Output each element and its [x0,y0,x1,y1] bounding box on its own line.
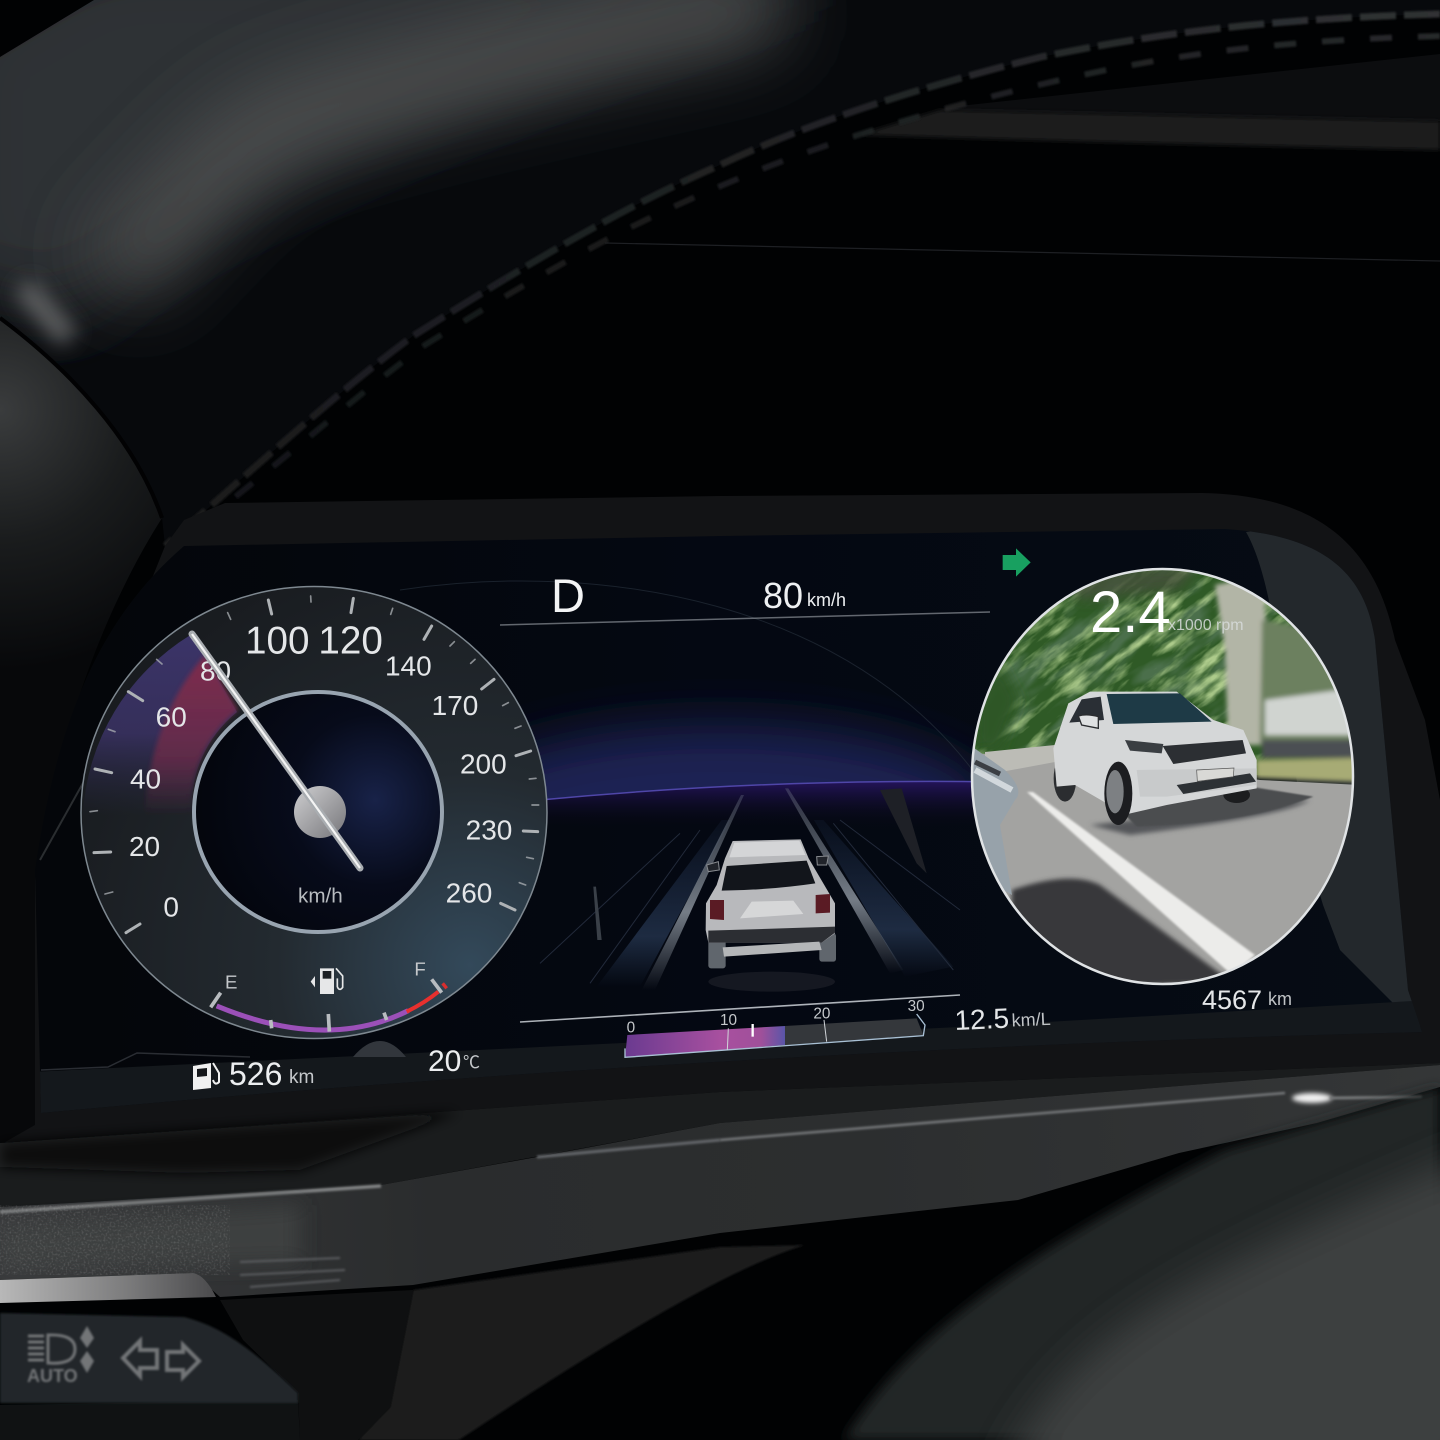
fuel gauge: E [225,971,237,992]
outside temperature [428,1045,480,1078]
speed labels: 80 [200,656,231,687]
photo backdrop: trees [975,570,1306,775]
speedometer [81,586,547,1038]
tick marks [90,596,539,933]
fuel economy readout: 12.5 [954,1003,1010,1036]
odometer: 4567 [1202,985,1262,1015]
fuel economy readout [954,1001,1051,1036]
outside temperature: 20 [428,1045,461,1078]
stalk icons [27,1326,199,1386]
icon: turn arrows [123,1341,199,1377]
fuel economy bar: 10 [720,1012,737,1029]
fuel economy bar: 0 [627,1020,635,1037]
road lanes [540,788,960,990]
secondary bezel panel [0,1063,1440,1207]
speed labels: 100 [245,619,309,662]
photo backdrop: road [982,754,1352,983]
speed labels: 40 [130,763,161,794]
cruise speed: 80 [763,575,803,616]
range readout [193,1056,314,1092]
side mirror [974,748,1018,895]
icon: beam arrows [80,1326,94,1373]
horizon glow [528,697,974,814]
following car [706,839,836,992]
speed labels: 230 [466,814,512,845]
outside temperature: ℃ [463,1053,480,1072]
range readout: 526 [229,1056,282,1092]
leather wedge [220,1290,413,1440]
icon: fuel pump [193,1063,219,1090]
cluster bezel [0,493,1440,1143]
speed labels [129,619,512,923]
fuel gauge: F [414,959,426,980]
fuel economy bar: 30 [908,998,925,1015]
oncoming car photo [1053,692,1313,827]
purple speed sector [83,634,238,815]
gear indicator: D [551,569,585,622]
lane line [1027,792,1255,975]
speed labels: 60 [156,702,187,733]
speed labels: 170 [432,690,478,721]
icon: green turn arrow [1003,548,1031,577]
stalk [0,1313,300,1440]
range readout: km [289,1067,314,1088]
rpm readout [1090,580,1244,645]
odometer: km [1268,989,1292,1009]
needle [192,634,360,868]
needle hub [294,786,346,838]
icon: fuel pump [311,968,343,994]
dashboard cowl [0,0,1440,560]
speed labels: 140 [385,650,432,681]
fuel gauge [211,959,447,1032]
cruise speed [763,575,846,616]
lower screen strip [30,1000,1430,1120]
speed labels: 260 [446,877,492,908]
speed labels: 20 [129,831,160,862]
fuel economy bar: 20 [813,1005,830,1022]
highlight [1292,1093,1332,1103]
screen [36,529,1420,1072]
rpm readout: 2.4 [1090,580,1171,645]
circle rim [972,569,1353,984]
stalk icons: AUTO [27,1366,78,1386]
gauge face [81,586,547,1038]
speed labels: 200 [460,748,507,779]
car interior shadow [1010,879,1232,990]
camera view circle [970,568,1354,986]
inner dial [194,692,442,932]
lower centre panel [358,1245,805,1440]
steering wheel rim [0,318,162,1145]
odometer [1202,985,1292,1015]
icon: headlight [28,1335,75,1363]
fuel economy readout: km/L [1011,1009,1051,1031]
cruise speed: km/h [807,590,846,610]
chrome accent [0,1273,216,1303]
photo backdrop: roadside buildings [1215,575,1360,782]
speed labels: 120 [318,619,383,662]
reflection on right glass [1246,532,1412,1002]
lower trim strip [0,1065,1440,1297]
rpm readout: x1000 rpm [1168,617,1244,634]
fuel economy bar [625,998,925,1058]
speed labels: km/h [298,885,343,908]
speed labels: 0 [163,892,179,923]
stitching [165,14,1440,546]
lower right column shroud [844,1087,1440,1440]
hood trim [605,54,1440,261]
